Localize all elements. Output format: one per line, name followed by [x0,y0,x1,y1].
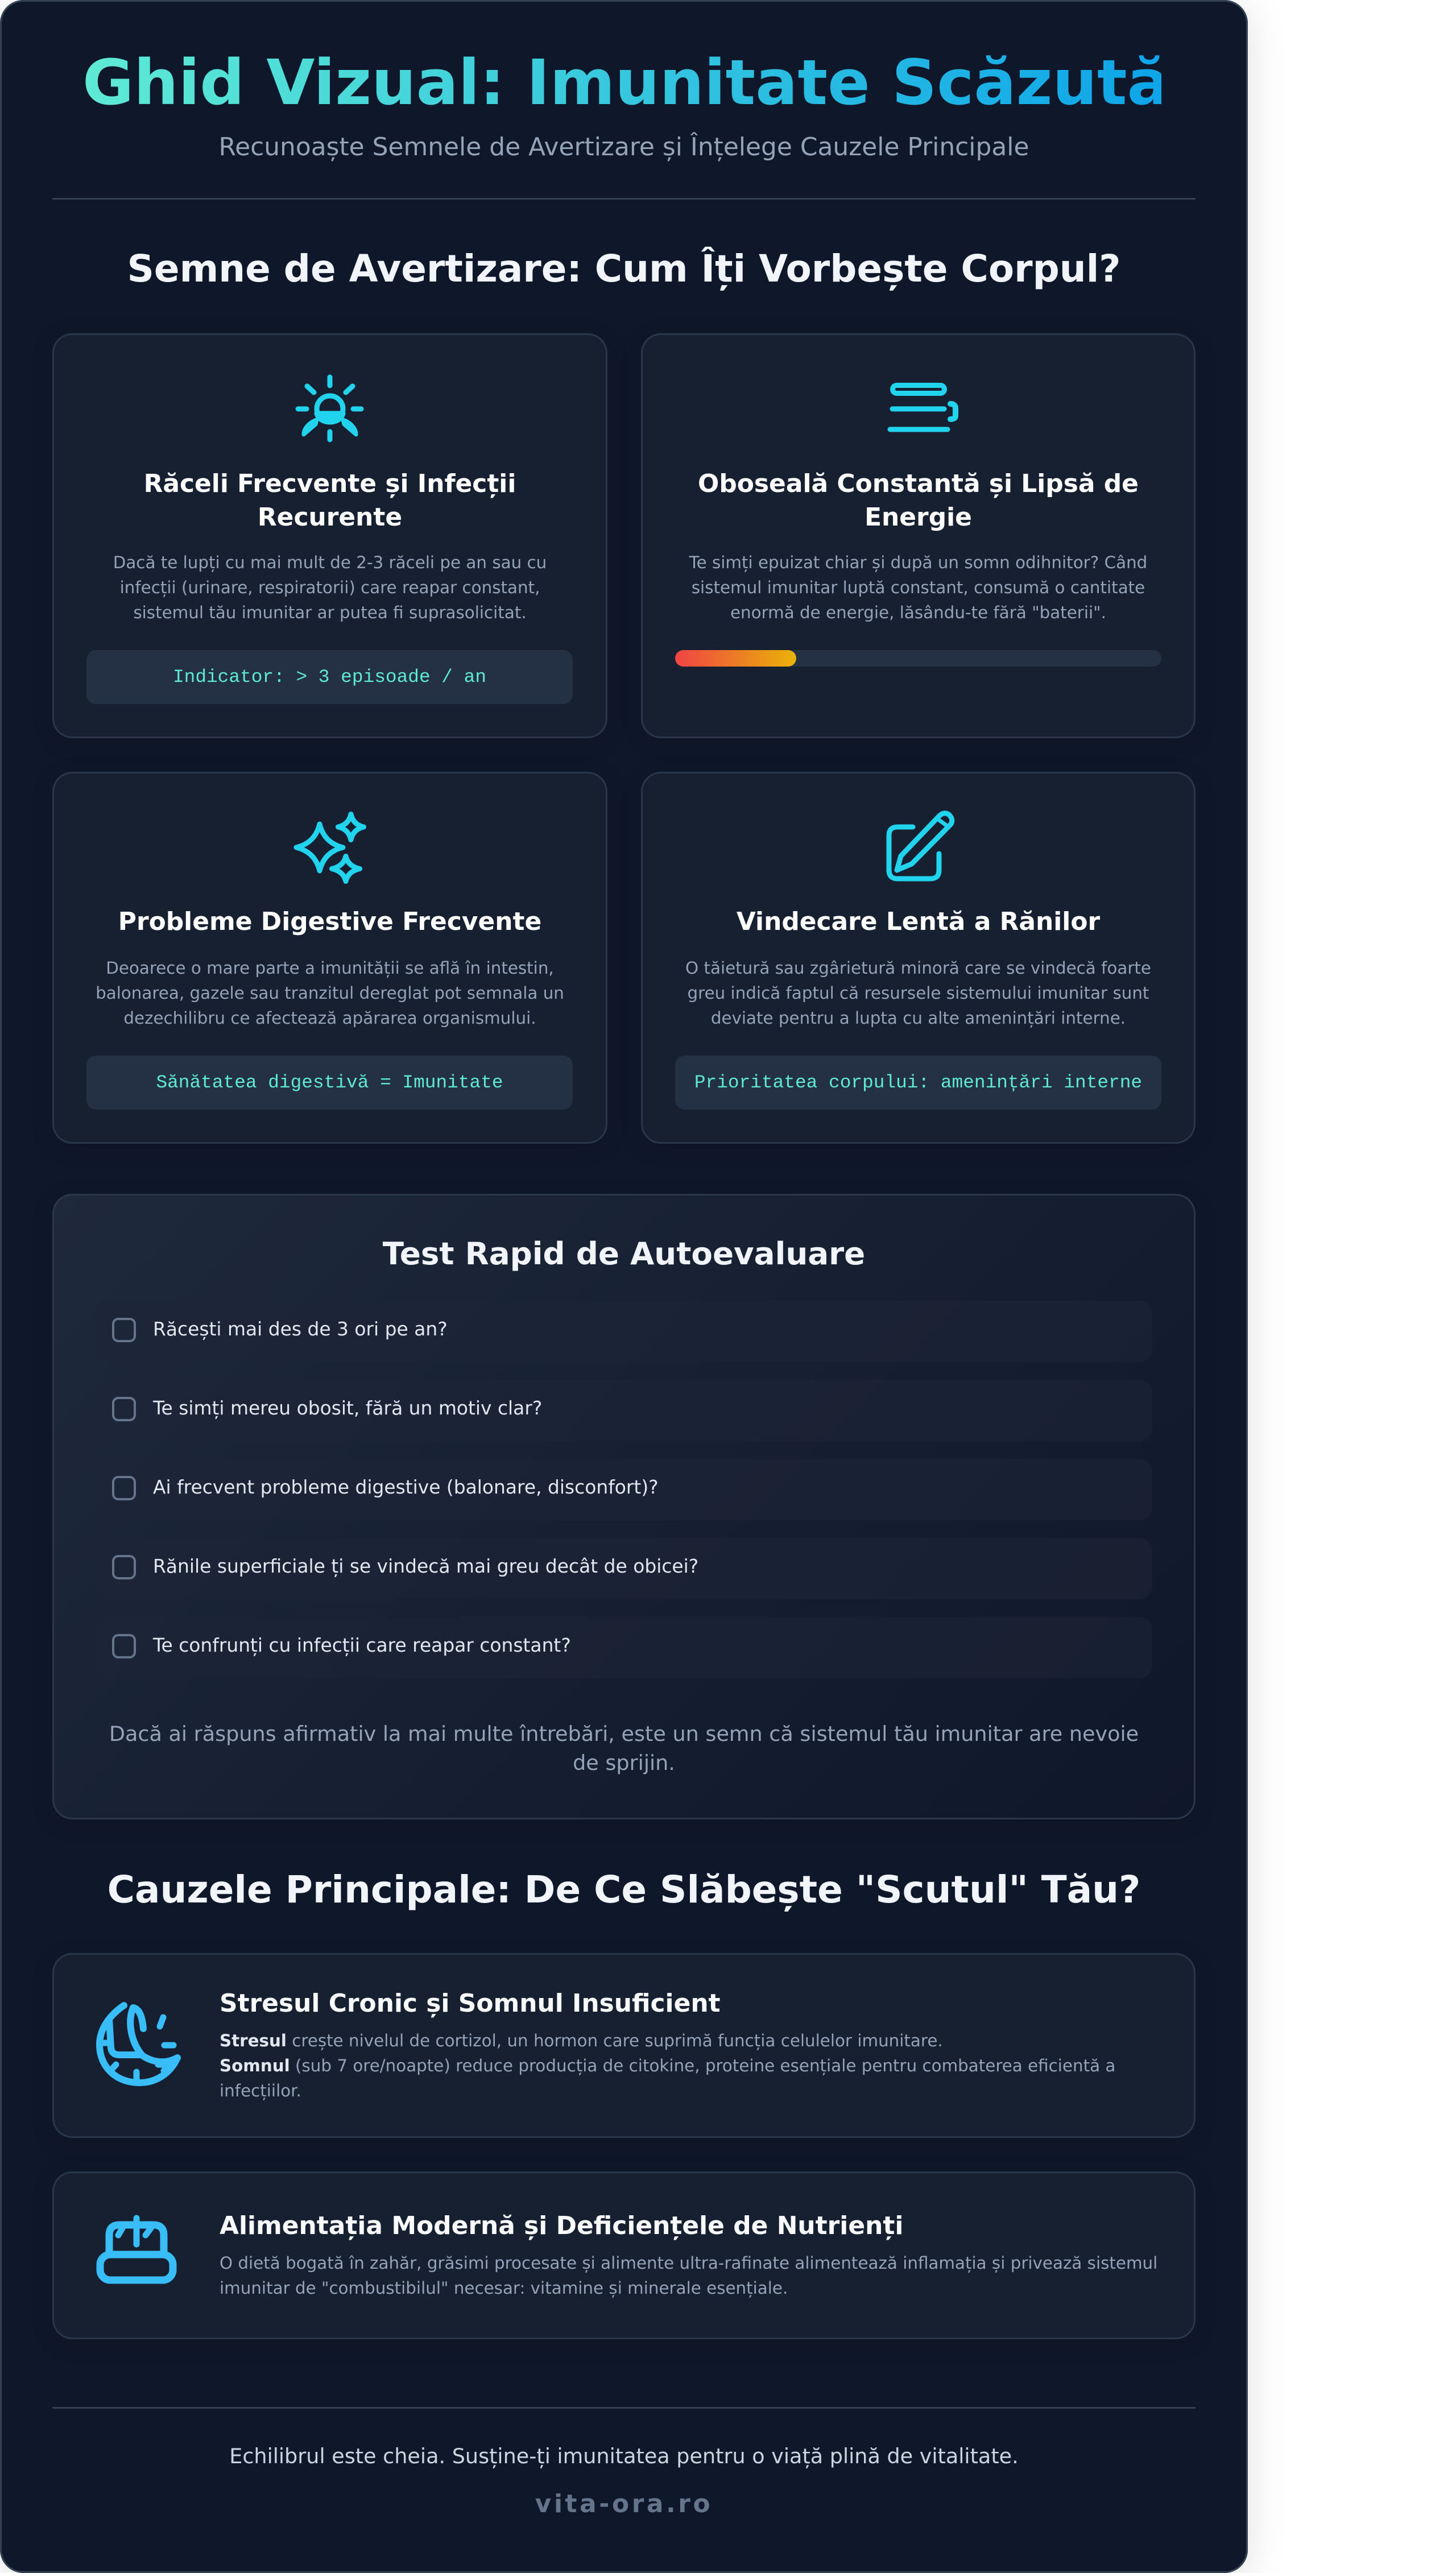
indicator box [86,650,573,704]
card heading [698,469,1139,532]
card text: deviate pentru a lupta cu alte amenințări interne. [711,1008,1126,1028]
cause text: O dietă bogată în zahăr, grăsimi procesate și alimente ultra-rafinate alimentează inflamația și privează sistemul [220,2253,1157,2273]
footer message: Echilibrul este cheia. Susține-ți imunitatea pentru o viață plină de vitalitate. [229,2444,1019,2468]
indicator box: Indicator: > 3 episoade / an [173,667,486,688]
checkbox [112,1634,136,1658]
card text: O tăietură sau zgârietură minoră care se vindecă foarte [685,958,1151,978]
cause text: infecțiilor. [220,2081,301,2100]
title: Ghid Vizual: Imunitate Scăzută [82,46,1169,119]
panel: slow healing [641,772,1196,1144]
card heading: Răceli Frecvente și Infecții [144,469,516,498]
indicator box [675,1056,1161,1110]
test conclusion: Dacă ai răspuns afirmativ la mai multe întrebări, este un semn că sistemul tău imunitar are nevoie [109,1722,1139,1746]
item text: Răcești mai des de 3 ori pe an? [153,1318,448,1340]
card text: enormă de energie, lăsându-te fără "baterii". [730,603,1106,622]
cause text [220,2253,1157,2298]
card heading: Vindecare Lentă a Rănilor [737,907,1100,936]
heading: main causes: Cauzele Principale: De Ce Slăbește "Scutul" Tău? [107,1868,1140,1912]
panel: frequent colds [52,333,607,738]
checklist item 1 [96,1301,1152,1362]
card text: sistemul imunitar luptă constant, consumă o cantitate [692,578,1145,597]
energy bar [675,650,1161,667]
subtitle: Recunoaște Semnele de Avertizare și Înțelege Cauzele Principale [219,132,1029,162]
card text [96,958,564,1028]
card text: Deoarece o mare parte a imunității se află în intestin, [106,958,554,978]
card text: Te simți epuizat chiar și după un somn odihnitor? Când [689,553,1147,572]
checklist item 4 [96,1538,1152,1599]
test conclusion: de sprijin. [573,1751,675,1775]
card heading: Recurente [258,503,402,532]
heading: warning signs: Semne de Avertizare: Cum Îți Vorbește Corpul? [127,247,1121,291]
test conclusion [109,1722,1139,1775]
cause text: imunitar de "combustibilul" necesar: vitamine și minerale esențiale. [220,2278,788,2298]
panel: constant fatigue [641,333,1196,738]
checklist item 5 [96,1617,1152,1678]
panel: digestive problems [52,772,607,1144]
indicator box: Sănătatea digestivă = Imunitate [156,1072,503,1093]
indicator box [86,1056,573,1110]
checklist item 2 [96,1380,1152,1441]
card text [113,553,547,622]
checkbox [112,1318,136,1342]
test heading: Test Rapid de Autoevaluare [383,1235,865,1272]
cause text: Somnul (sub 7 ore/noapte) reduce producția de citokine, proteine esențiale pentru combaterea eficientă a [220,2056,1115,2075]
cause text: Stresul crește nivelul de cortizol, un hormon care suprimă funcția celulelor imunitare. [220,2031,943,2050]
checklist item 3 [96,1459,1152,1520]
checkbox [112,1555,136,1579]
item text: Rănile superficiale ți se vindecă mai greu decât de obicei? [153,1555,698,1577]
icon: low battery lines [887,383,958,432]
item text: Te simți mereu obosit, fără un motiv clar? [153,1397,542,1419]
card text: Dacă te lupți cu mai mult de 2-3 răceli pe an sau cu [113,553,547,572]
checkbox [112,1397,136,1421]
icon: sun figure [296,374,364,442]
cause text [220,2031,1115,2100]
checkbox [112,1476,136,1500]
icon: cake [97,2215,176,2284]
card text: greu indică faptul că resursele sistemului imunitar sunt [688,983,1149,1003]
card text [685,958,1151,1028]
card heading: Oboseală Constantă și Lipsă de [698,469,1139,498]
cause heading: Stresul Cronic și Somnul Insuficient [220,1989,721,2018]
card heading [144,469,516,532]
icon: sparkles [293,812,366,884]
card text: balonarea, gazele sau tranzitul dereglat pot semnala un [96,983,564,1003]
panel: self-assessment test [52,1194,1196,1819]
item text: Te confrunți cu infecții care reapar constant? [153,1634,571,1656]
panel: stress and sleep [52,1953,1196,2138]
card text: sistemul tău imunitar ar putea fi suprasolicitat. [133,603,527,622]
card text [689,553,1147,622]
icon: pencil square [886,810,954,882]
icon: moon and clock [96,2002,181,2086]
card text: dezechilibru ce afectează apărarea organismului. [123,1008,536,1028]
card heading: Energie [864,503,972,532]
indicator box: Prioritatea corpului: amenințări interne [694,1072,1142,1093]
panel: modern diet [52,2171,1196,2339]
item text: Ai frecvent probleme digestive (balonare, disconfort)? [153,1476,659,1498]
cause heading: Alimentația Modernă și Deficiențele de Nutrienți [220,2211,903,2240]
footer site: vita-ora.ro [535,2489,713,2518]
card heading: Probleme Digestive Frecvente [118,907,541,936]
card text: infecții (urinare, respiratorii) care reapar constant, [120,578,540,597]
